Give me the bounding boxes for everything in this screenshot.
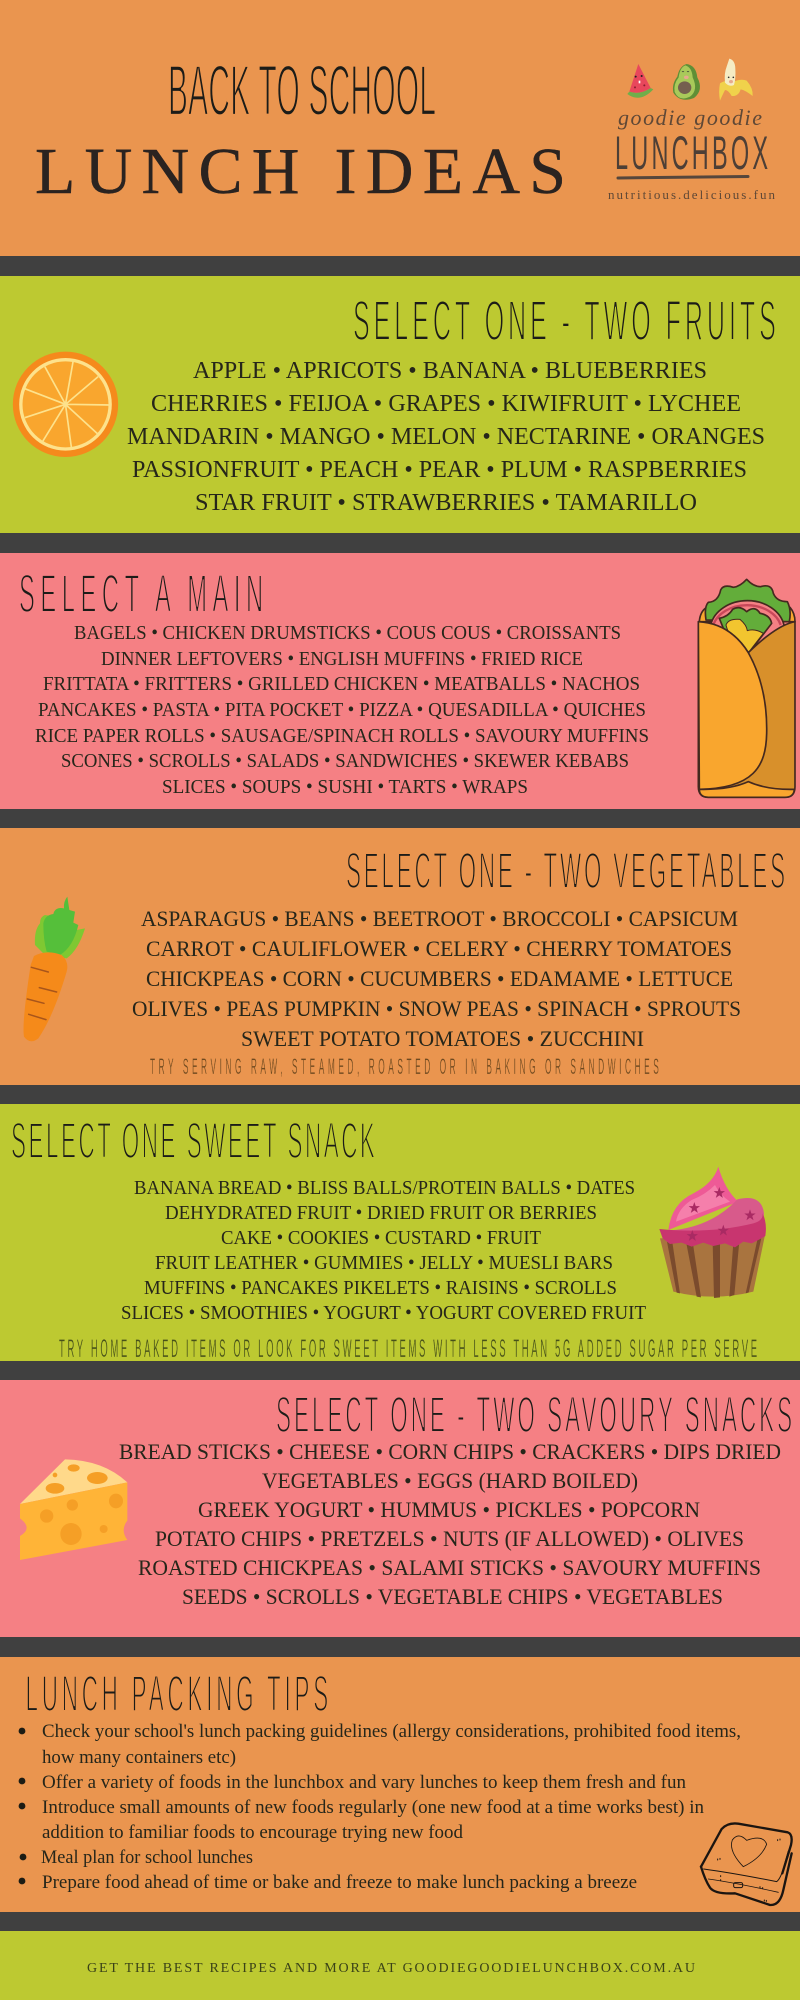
list: tips: Introduce small amounts of new foods regularly (one new food at a time works best) in <box>42 1797 704 1818</box>
list: fruits: APPLE • APRICOTS • BANANA • BLUEBERRIES <box>193 358 707 384</box>
heading: lunch packing tips: LUNCH PACKING TIPS <box>26 1666 328 1723</box>
icon: lunchbox <box>701 1823 792 1905</box>
bullets <box>19 1728 26 1884</box>
panel: vegetables <box>0 828 800 1085</box>
list: tips: Check your school's lunch packing guidelines (allergy considerations, prohibited food items, <box>42 1721 741 1742</box>
icon: avocado <box>673 64 700 100</box>
list: sweet snacks: SLICES • SMOOTHIES • YOGURT • YOGURT COVERED FRUIT <box>121 1302 646 1324</box>
list: savoury snacks: VEGETABLES • EGGS (HARD BOILED) <box>262 1468 638 1493</box>
list: sweet snacks: DEHYDRATED FRUIT • DRIED FRUIT OR BERRIES <box>165 1202 597 1224</box>
list: fruits: CHERRIES • FEIJOA • GRAPES • KIWIFRUIT • LYCHEE <box>151 391 741 417</box>
list: tips: Meal plan for school lunches <box>41 1847 253 1868</box>
panel: savoury snacks <box>0 1380 800 1637</box>
list: sweet snacks: BANANA BREAD • BLISS BALLS/PROTEIN BALLS • DATES <box>134 1177 635 1199</box>
panel: fruits <box>0 276 800 533</box>
list: tips: Offer a variety of foods in the lunchbox and vary lunches to keep them fresh and fun <box>42 1772 686 1793</box>
heading: select fruits: SELECT ONE - TWO FRUITS <box>353 290 776 353</box>
list: mains: DINNER LEFTOVERS • ENGLISH MUFFINS • FRIED RICE <box>101 648 583 670</box>
footer call to action: GET THE BEST RECIPES AND MORE AT GOODIEGOODIELUNCHBOX.COM.AU <box>87 1961 695 1976</box>
icon: cupcake <box>659 1167 766 1298</box>
heading: select a main: SELECT A MAIN <box>19 563 263 624</box>
list: vegetables <box>132 906 741 1051</box>
list: vegetables: SWEET POTATO TOMATOES • ZUCCHINI <box>241 1026 644 1051</box>
title: lunch ideas: LUNCH IDEAS <box>35 135 566 208</box>
list: mains <box>35 622 649 798</box>
icon: banana <box>719 59 753 101</box>
list: sweet snacks <box>121 1177 646 1324</box>
logo tagline: nutritious.delicious.fun <box>608 187 776 202</box>
list: tips: Prepare food ahead of time or bake and freeze to make lunch packing a breeze <box>42 1872 637 1893</box>
icon: wrap <box>698 579 795 797</box>
logo script: goodie goodie <box>618 105 762 130</box>
list: tips <box>19 1721 741 1893</box>
list: sweet snacks: MUFFINS • PANCAKES PIKELETS • RAISINS • SCROLLS <box>144 1277 617 1299</box>
list: vegetables: ASPARAGUS • BEANS • BEETROOT • BROCCOLI • CAPSICUM <box>141 906 738 931</box>
list: fruits: MANDARIN • MANGO • MELON • NECTARINE • ORANGES <box>127 424 765 450</box>
list: savoury snacks: GREEK YOGURT • HUMMUS • PICKLES • POPCORN <box>198 1497 700 1522</box>
title: back to school: BACK TO SCHOOL <box>168 51 436 131</box>
icon: carrot <box>24 897 85 1041</box>
panel: header <box>0 0 800 256</box>
logo: goodie goodie lunchbox <box>608 59 776 202</box>
heading: select savoury snacks: SELECT ONE - TWO SAVOURY SNACKS <box>276 1387 792 1444</box>
list: mains: RICE PAPER ROLLS • SAUSAGE/SPINACH ROLLS • SAVOURY MUFFINS <box>35 725 649 747</box>
icon: watermelon <box>627 64 653 98</box>
list: vegetables: CARROT • CAULIFLOWER • CELERY • CHERRY TOMATOES <box>146 936 732 961</box>
panel: lunch packing tips <box>0 1657 800 1912</box>
list: fruits: STAR FRUIT • STRAWBERRIES • TAMARILLO <box>195 490 697 516</box>
note: vegetable serving tip: TRY SERVING RAW, STEAMED, ROASTED OR IN BAKING OR SANDWICHES <box>150 1054 659 1079</box>
panel: mains <box>0 553 800 809</box>
list: savoury snacks: POTATO CHIPS • PRETZELS • NUTS (IF ALLOWED) • OLIVES <box>155 1526 744 1551</box>
list: savoury snacks: ROASTED CHICKPEAS • SALAMI STICKS • SAVOURY MUFFINS <box>138 1555 761 1580</box>
list: fruits <box>127 358 765 516</box>
list: mains: FRITTATA • FRITTERS • GRILLED CHICKEN • MEATBALLS • NACHOS <box>43 673 640 695</box>
list: vegetables: CHICKPEAS • CORN • CUCUMBERS • EDAMAME • LETTUCE <box>146 966 733 991</box>
list: tips: how many containers etc) <box>42 1747 236 1768</box>
list: savoury snacks <box>119 1439 781 1609</box>
list: sweet snacks: CAKE • COOKIES • CUSTARD • FRUIT <box>221 1227 541 1249</box>
icon: orange slice <box>13 352 118 457</box>
list: tips: addition to familiar foods to encourage trying new food <box>42 1822 463 1843</box>
icon: cheese <box>20 1459 127 1560</box>
list: savoury snacks: SEEDS • SCROLLS • VEGETABLE CHIPS • VEGETABLES <box>182 1584 723 1609</box>
list: mains: BAGELS • CHICKEN DRUMSTICKS • COUS COUS • CROISSANTS <box>74 622 621 644</box>
list: mains: SLICES • SOUPS • SUSHI • TARTS • WRAPS <box>162 776 528 798</box>
logo underline <box>618 176 748 178</box>
heading: select vegetables: SELECT ONE - TWO VEGETABLES <box>346 843 785 900</box>
list: savoury snacks: BREAD STICKS • CHEESE • CORN CHIPS • CRACKERS • DIPS DRIED <box>119 1439 781 1464</box>
list: fruits: PASSIONFRUIT • PEACH • PEAR • PLUM • RASPBERRIES <box>132 457 747 483</box>
list: mains: SCONES • SCROLLS • SALADS • SANDWICHES • SKEWER KEBABS <box>61 750 629 772</box>
heading: select sweet snack: SELECT ONE SWEET SNACK <box>11 1113 375 1170</box>
logo wordmark: LUNCHBOX <box>615 126 768 179</box>
panel: footer <box>0 1931 800 2000</box>
list: vegetables: OLIVES • PEAS PUMPKIN • SNOW PEAS • SPINACH • SPROUTS <box>132 996 741 1021</box>
list: sweet snacks: FRUIT LEATHER • GUMMIES • JELLY • MUESLI BARS <box>155 1252 613 1274</box>
panel: sweet snacks <box>0 1104 800 1364</box>
note: sweet snack tip: TRY HOME BAKED ITEMS OR LOOK FOR SWEET ITEMS WITH LESS THAN 5G ADDED SUGAR PER SERVE <box>59 1336 757 1364</box>
list: mains: PANCAKES • PASTA • PITA POCKET • PIZZA • QUESADILLA • QUICHES <box>38 699 646 721</box>
